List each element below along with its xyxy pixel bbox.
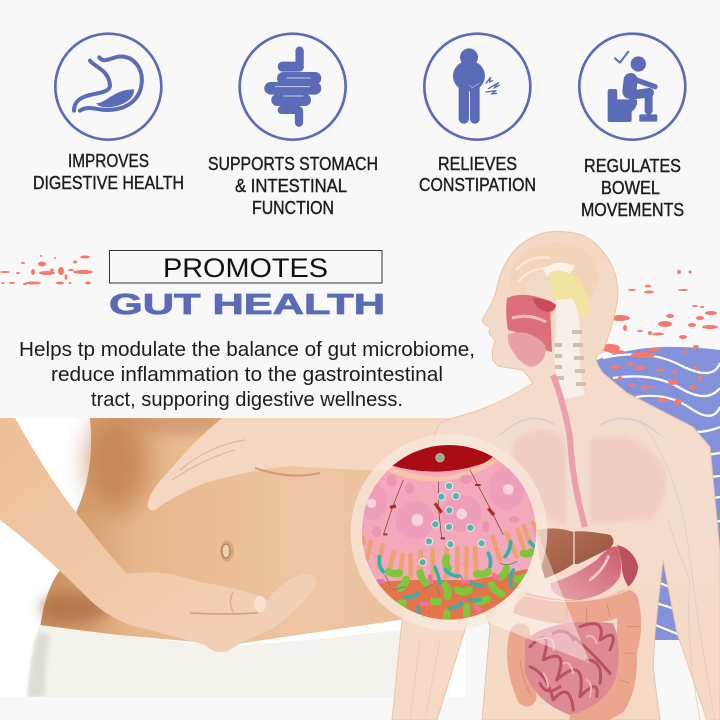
coral splatter: right	[600, 270, 718, 405]
bacteria	[378, 542, 534, 618]
label: supports stomach and intestinal function: SUPPORTS STOMACH	[208, 154, 378, 174]
icon: person with stomach pain	[424, 34, 530, 140]
label: regulates bowel movements: BOWEL	[601, 178, 660, 198]
small intestine	[525, 622, 619, 715]
liver	[537, 528, 613, 578]
torso	[40, 418, 420, 645]
cell nuclei	[360, 468, 525, 539]
organs	[490, 528, 640, 715]
tissue	[360, 443, 540, 623]
anatomy figure	[392, 232, 720, 720]
description text: reduce inflammation to the gastrointestinal	[51, 363, 443, 386]
description text	[19, 338, 475, 411]
benefit labels	[33, 151, 684, 220]
coral splatter: left	[0, 255, 93, 285]
lumen	[377, 569, 528, 620]
label: improves digestive health: IMPROVES	[68, 151, 149, 171]
icon: intestine	[240, 34, 346, 140]
esophagus	[553, 375, 585, 527]
heading: promotes: PROMOTES	[163, 253, 328, 283]
teal molecules	[419, 482, 485, 566]
left forearm and lower hand	[0, 418, 316, 652]
icon: person on toilet	[579, 34, 685, 140]
pale ring	[351, 434, 547, 631]
label: relieves constipation: CONSTIPATION	[419, 175, 536, 195]
colon	[517, 588, 640, 715]
label: regulates bowel movements: MOVEMENTS	[581, 200, 684, 220]
label: relieves constipation: RELIEVES	[438, 154, 517, 174]
icon: stomach	[55, 34, 161, 140]
spine	[555, 298, 586, 400]
decorative blue wave shape	[592, 347, 720, 640]
nasal cavity and mouth	[506, 295, 556, 367]
label: improves digestive health	[33, 151, 184, 193]
upper hand	[148, 418, 465, 510]
description text: Helps tp modulate the balance of gut microbiome,	[19, 338, 475, 361]
navel	[220, 540, 234, 562]
towel	[27, 625, 400, 697]
villi	[363, 523, 537, 577]
body outline	[392, 232, 720, 720]
label: supports stomach and intestinal function: FUNCTION	[252, 198, 334, 218]
label: regulates bowel movements	[581, 156, 684, 220]
spleen	[617, 545, 638, 587]
label: improves digestive health: DIGESTIVE HEALTH	[33, 173, 184, 193]
blood vessel	[388, 445, 496, 482]
label: regulates bowel movements: REGULATES	[584, 156, 681, 176]
description text: tract, supporing digestive wellness.	[91, 388, 403, 411]
label: relieves constipation	[419, 154, 536, 195]
cell walls	[383, 470, 503, 538]
chest shading and lungs	[500, 418, 666, 525]
magnifier beam	[490, 530, 590, 663]
icon row	[55, 34, 685, 140]
magnified gut lining circle	[351, 434, 547, 631]
heading: gut health: GUT HEALTH	[109, 289, 385, 321]
label: supports stomach and intestinal function: & INTESTINAL	[235, 176, 347, 196]
arm veins	[410, 420, 715, 720]
brain and skull	[510, 242, 600, 318]
heading: promotes	[110, 250, 382, 283]
stomach	[550, 546, 621, 600]
label: supports stomach and intestinal function	[208, 154, 378, 218]
photo: hands on abdomen	[0, 412, 465, 697]
